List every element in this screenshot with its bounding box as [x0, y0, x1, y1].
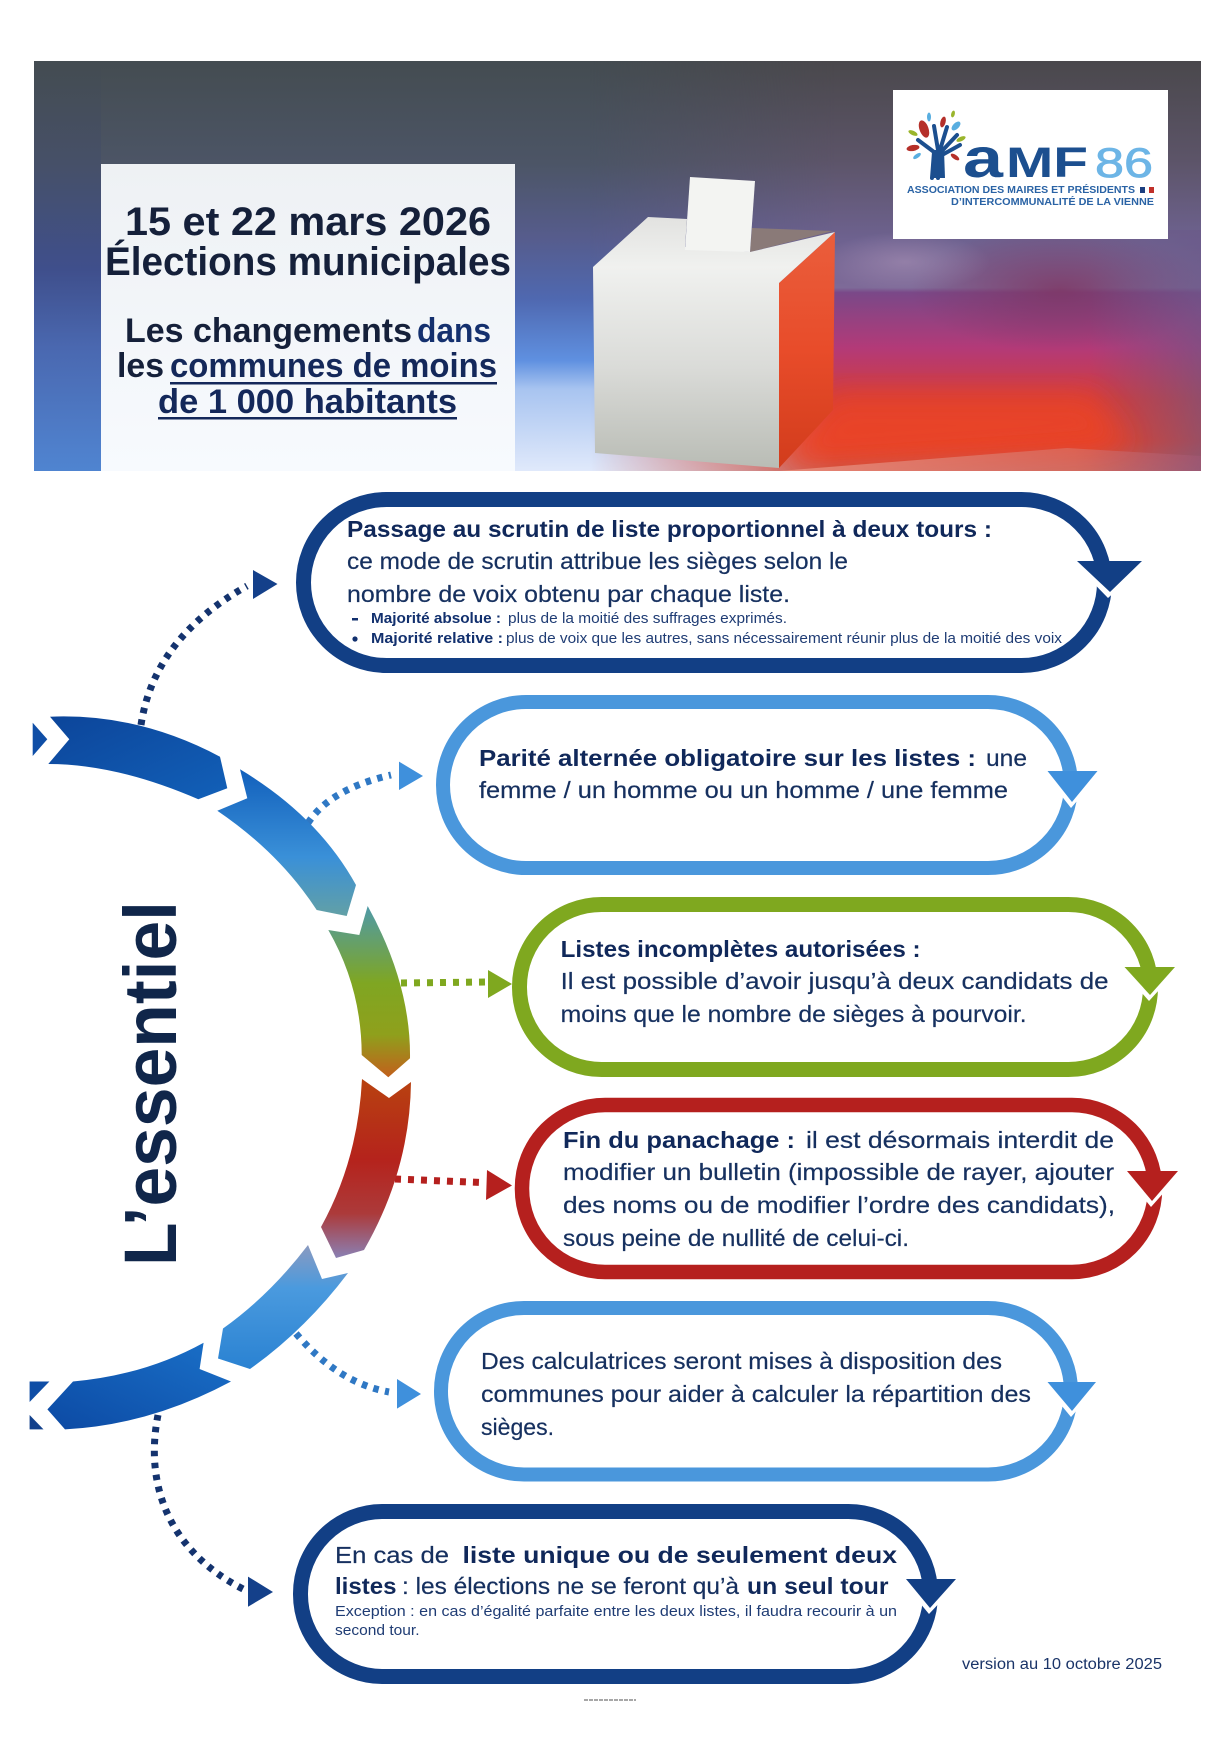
card 6 text: listes	[335, 1573, 396, 1599]
logo: AMF 86: a	[963, 126, 1004, 189]
dotted arrow to card 2	[308, 762, 423, 823]
arc segment 4	[321, 1079, 411, 1258]
card 5 text: communes pour aider à calculer la répartition des	[481, 1381, 1031, 1407]
card 6 text: : les élections ne se feront qu’à	[402, 1573, 739, 1599]
dotted arrow to card 4	[395, 1170, 512, 1200]
logo: AMF 86: ASSOCIATION DES MAIRES ET PRÉSIDENTS	[907, 183, 1135, 196]
card 6 text: second tour.	[335, 1623, 420, 1639]
arc segment 6	[47, 1343, 231, 1429]
arrow head	[906, 1579, 956, 1608]
card 6 text: En cas de	[335, 1542, 449, 1568]
card 6 text: un seul tour	[747, 1573, 889, 1599]
icon: tree hand	[906, 110, 966, 178]
card 1 bullets	[352, 611, 1063, 647]
card 1 body	[347, 548, 848, 607]
card 1 bullets: plus de voix que les autres, sans nécessairement réunir plus de la moitié des voix	[506, 631, 1063, 647]
subtitle: dans	[417, 312, 491, 350]
arrow head	[1048, 1382, 1096, 1411]
card 1 bullets: Majorité relative :	[371, 631, 503, 647]
arc end marker	[30, 1382, 49, 1429]
dotted arrow to card 5	[296, 1334, 421, 1409]
card 3 text: moins que le nombre de sièges à pourvoir.	[561, 1001, 1027, 1027]
card 4 text: modifier un bulletin (impossible de rayer, ajouter	[563, 1159, 1114, 1185]
card 4 text: il est désormais interdit de	[806, 1127, 1114, 1153]
card 1 body: nombre de voix obtenu par chaque liste.	[347, 581, 790, 607]
icon: ballot box	[593, 177, 835, 468]
card 2 text: Parité alternée obligatoire sur les listes :	[479, 745, 976, 771]
dotted arrow to card 3	[401, 970, 512, 998]
card 3: listes incomplètes	[520, 904, 1180, 1070]
arc segment 2	[217, 769, 356, 916]
card 1 body: ce mode de scrutin attribue les sièges selon le	[347, 548, 848, 574]
logo: AMF 86: 86	[1095, 139, 1153, 186]
vertical title: L’essentiel	[109, 901, 192, 1266]
card 1 heading: Passage au scrutin de liste proportionnel à deux tours :	[347, 516, 992, 542]
card 4 text	[563, 1127, 1115, 1251]
date heading: 15 et 22 mars 2026	[125, 200, 491, 244]
card 4: fin du panachage	[522, 1105, 1183, 1272]
dotted arrow to card 1	[141, 570, 278, 725]
card 2: parité	[443, 702, 1103, 868]
arrow head	[1124, 967, 1175, 995]
card 3 text: Listes incomplètes autorisées :	[561, 936, 921, 962]
card 3 text	[561, 936, 1109, 1027]
card 1 bullets: Majorité absolue :	[371, 611, 501, 627]
card 2 text	[479, 745, 1027, 803]
subtitle: Les changements	[125, 312, 412, 350]
card 6 text	[335, 1542, 897, 1639]
card 2 text: femme / un homme ou un homme / une femme	[479, 777, 1008, 803]
logo: AMF 86: MF	[1006, 139, 1088, 187]
card 5: calculatrices	[441, 1308, 1102, 1474]
card 6 text: Exception : en cas d’égalité parfaite entre les deux listes, il faudra recourir à un	[335, 1604, 897, 1620]
subtitle: les	[117, 347, 164, 385]
card 5 text: sièges.	[481, 1414, 554, 1440]
card 6: liste unique	[300, 1512, 962, 1676]
card 6 text: liste unique ou de seulement deux	[462, 1542, 897, 1568]
arc segment 1	[48, 716, 227, 799]
card 4 text: des noms ou de modifier l’ordre des candidats),	[563, 1192, 1115, 1218]
subtitle: communes de moins	[170, 347, 497, 385]
card 5 text: Des calculatrices seront mises à disposition des	[481, 1348, 1002, 1374]
chevron arc	[30, 716, 411, 1429]
card 1: scrutin de liste	[304, 500, 1149, 666]
header banner	[34, 61, 1210, 471]
logo: AMF 86: D’INTERCOMMUNALITÉ DE LA VIENNE	[951, 195, 1154, 208]
logo: AMF 86	[893, 90, 1168, 239]
version note: version au 10 octobre 2025	[962, 1656, 1162, 1673]
card 2 text: une	[986, 745, 1027, 771]
arrow head	[1048, 771, 1098, 802]
card 1 bullets: plus de la moitié des suffrages exprimés.	[508, 611, 787, 627]
card 5 text	[481, 1348, 1031, 1440]
subtitle: de 1 000 habitants	[158, 383, 457, 421]
card 4 text: sous peine de nullité de celui-ci.	[563, 1225, 909, 1251]
arrow head	[1077, 561, 1142, 592]
dotted arrow to card 6	[154, 1415, 273, 1607]
arc segment 5	[218, 1245, 348, 1369]
heading panel	[101, 164, 515, 471]
subtitle	[117, 312, 497, 421]
arc segment 3	[328, 906, 410, 1077]
arrow head	[1127, 1171, 1178, 1201]
card 3 text: Il est possible d’avoir jusqu’à deux candidats de	[561, 968, 1109, 994]
card 4 text: Fin du panachage :	[563, 1127, 795, 1153]
election heading: Élections municipales	[105, 239, 511, 284]
arc start marker	[33, 723, 47, 756]
